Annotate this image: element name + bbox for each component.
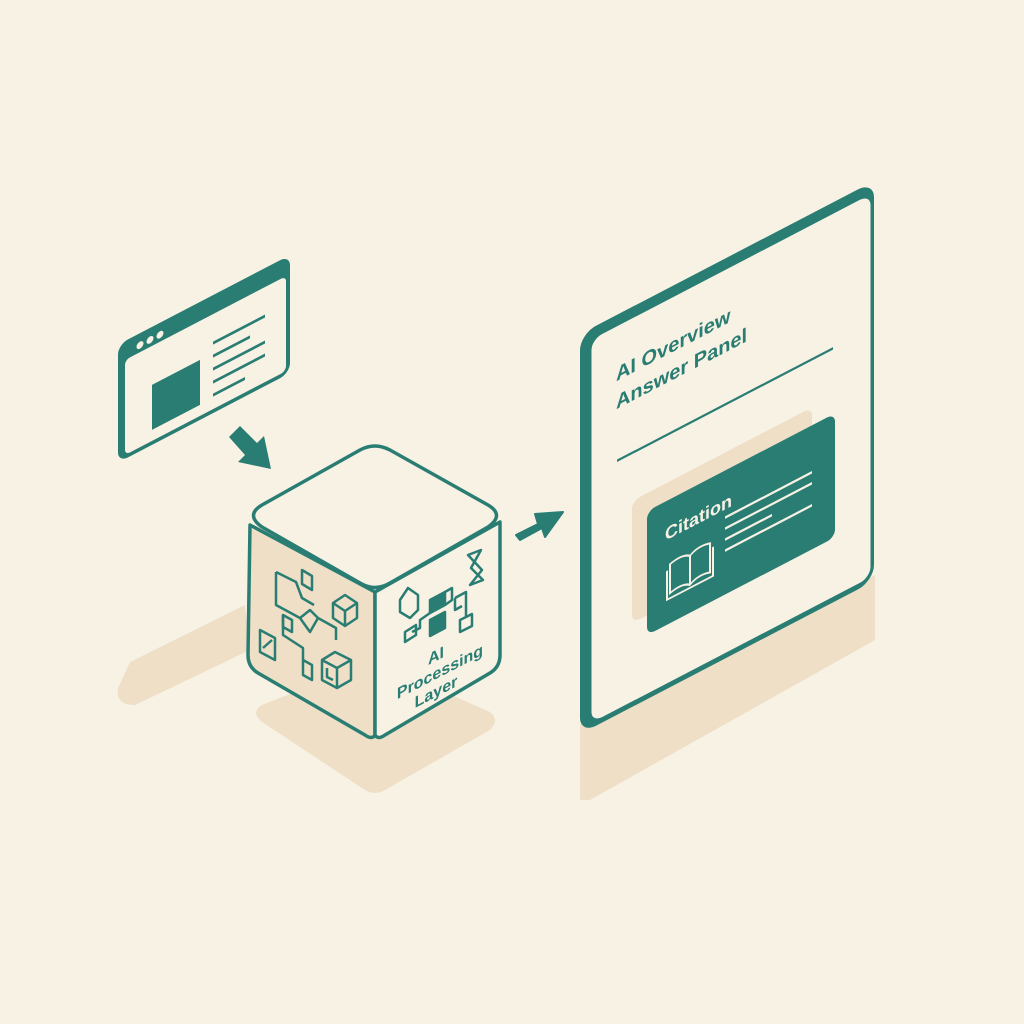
cube right face	[375, 522, 500, 738]
arrow: cube to panel	[516, 512, 563, 540]
panel title: Answer Panel	[616, 323, 747, 414]
arrow: browser to cube	[229, 426, 271, 469]
cube label	[397, 622, 483, 721]
left face network icons	[260, 570, 357, 688]
panel title: AI Overview	[616, 304, 731, 386]
shadow: long band left of cube	[118, 605, 250, 705]
citation card	[632, 395, 835, 643]
cube label: Layer	[415, 672, 458, 712]
icon: open book	[667, 540, 713, 600]
cube label: AI	[428, 643, 444, 669]
shadow: under cube	[256, 690, 495, 793]
shadow: under panel	[580, 575, 875, 800]
browser window icon	[118, 255, 290, 463]
right face network icons	[400, 550, 483, 642]
panel: AI overview answer	[580, 181, 874, 734]
cube label: Processing	[397, 640, 483, 703]
cube left face	[248, 525, 375, 738]
citation card: Citation	[665, 491, 732, 546]
cube top face	[254, 446, 496, 588]
cube: AI processing layer	[248, 446, 500, 738]
